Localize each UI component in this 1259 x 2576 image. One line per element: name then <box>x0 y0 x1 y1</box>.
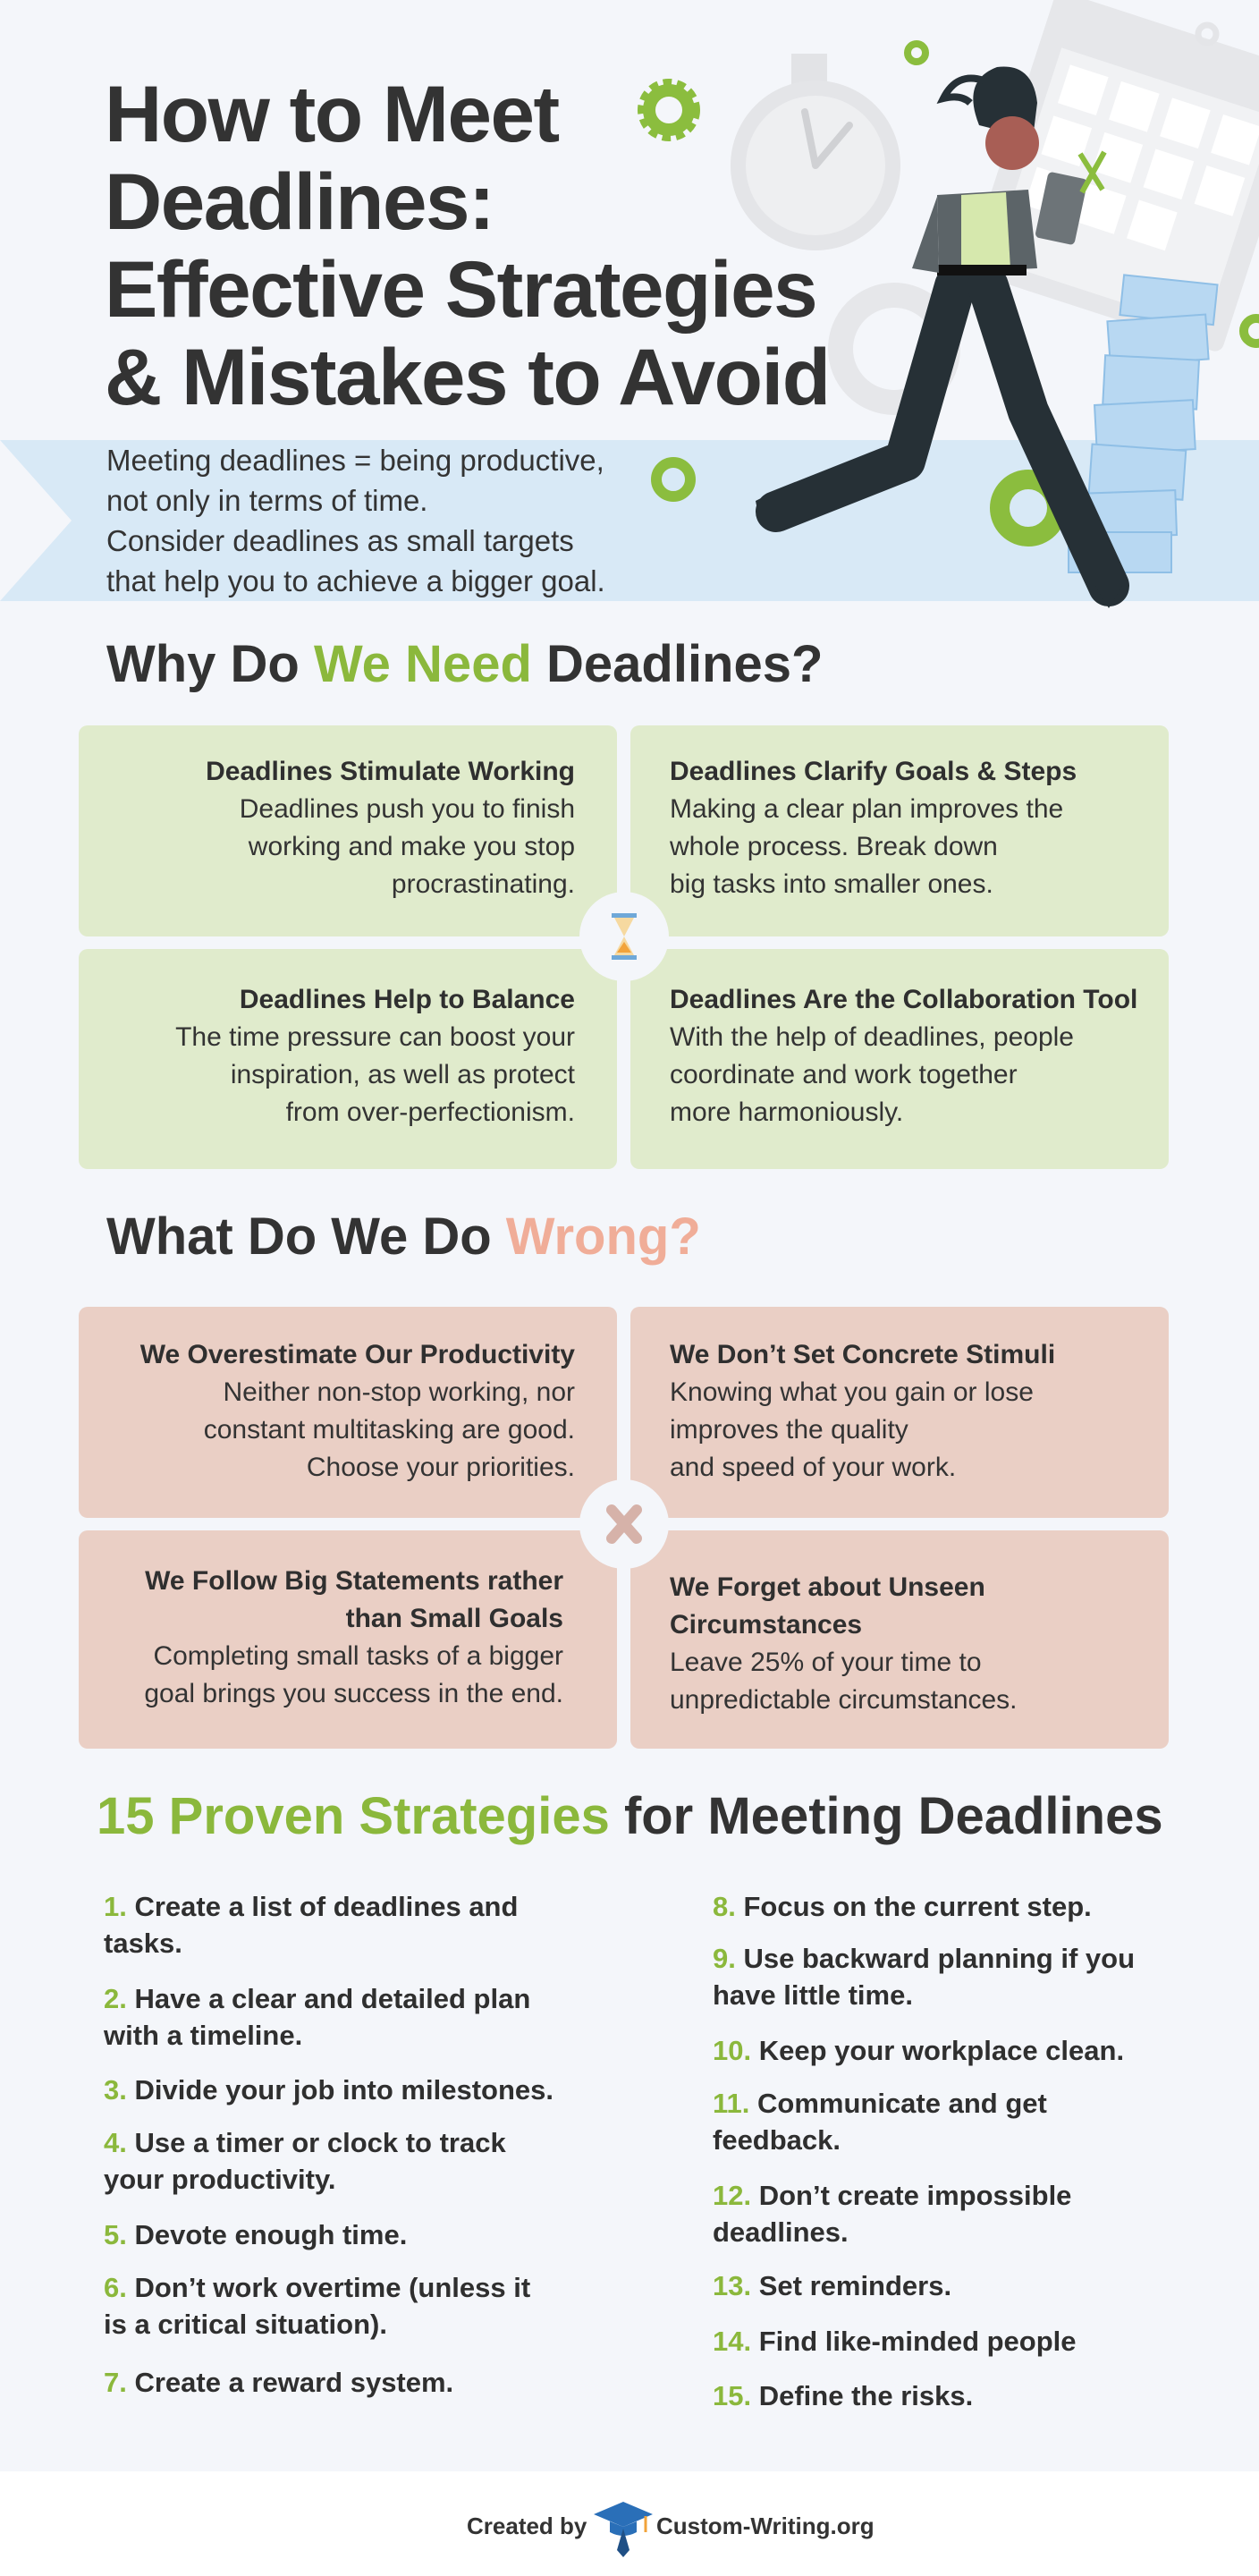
list: strategies right: have little time. <box>713 1979 913 2011</box>
list: strategies right: 12. Don’t create impossible <box>713 2180 1071 2211</box>
card: collaboration: coordinate and work together <box>670 1060 1018 1089</box>
list: strategies left: with a timeline. <box>104 2020 302 2051</box>
title: Deadlines: <box>105 157 494 246</box>
list: strategies right: 15. Define the risks. <box>713 2380 973 2411</box>
card: clarify: whole process. Break down <box>670 832 998 861</box>
list: strategies left: is a critical situation). <box>104 2309 387 2340</box>
heading: strategies: 15 Proven Strategies for Meeting Deadlines <box>97 1787 1163 1845</box>
card: overestimate: constant multitasking are good. <box>204 1415 575 1445</box>
list: strategies left: tasks. <box>104 1928 182 1959</box>
clock <box>731 54 900 250</box>
list: strategies left <box>104 1891 553 2398</box>
card: clarify: Deadlines Clarify Goals & Steps <box>670 757 1077 786</box>
banner text: Consider deadlines as small targets <box>106 524 574 557</box>
card: balance: The time pressure can boost your <box>175 1022 575 1052</box>
card: unseen: Circumstances <box>670 1610 862 1640</box>
woman <box>756 66 1122 608</box>
card: overestimate <box>79 1307 617 1518</box>
card: balance: inspiration, as well as protect <box>231 1060 575 1089</box>
title: & Mistakes to Avoid <box>105 332 830 421</box>
footer <box>0 2471 1259 2576</box>
card: stimuli: We Don’t Set Concrete Stimuli <box>670 1340 1055 1369</box>
banner text: not only in terms of time. <box>106 484 427 517</box>
card: unseen: We Forget about Unseen <box>670 1572 985 1602</box>
footer text: created by: Created by <box>467 2512 587 2539</box>
list: strategies left: 6. Don’t work overtime (unless it <box>104 2272 530 2303</box>
list: strategies right: 9. Use backward planning if you <box>713 1943 1135 1974</box>
card: clarify: big tasks into smaller ones. <box>670 869 993 899</box>
list: strategies left: your productivity. <box>104 2164 336 2195</box>
calendar <box>966 0 1259 353</box>
banner text: Meeting deadlines = being productive, <box>106 444 604 477</box>
list: strategies right <box>713 1891 1135 2411</box>
list: strategies right: 14. Find like-minded people <box>713 2326 1077 2357</box>
list: strategies right: feedback. <box>713 2124 841 2156</box>
banner <box>0 440 1259 601</box>
card: big statements <box>79 1530 617 1749</box>
heading: wrong: What Do We Do Wrong? <box>106 1208 701 1266</box>
card: unseen <box>630 1530 1169 1749</box>
card: collaboration <box>630 949 1169 1169</box>
card: stimuli: improves the quality <box>670 1415 908 1445</box>
card: stimulate: Deadlines Stimulate Working <box>206 757 575 786</box>
heading: why: Why Do We Need Deadlines? <box>106 635 823 693</box>
card: unseen: Leave 25% of your time to <box>670 1648 982 1677</box>
card: stimuli: Knowing what you gain or lose <box>670 1377 1034 1407</box>
card: stimulate: procrastinating. <box>392 869 575 899</box>
list: strategies left: 7. Create a reward system. <box>104 2367 453 2398</box>
card: balance <box>79 949 617 1169</box>
icon: x <box>579 1479 669 1569</box>
list: strategies right: 8. Focus on the current step. <box>713 1891 1092 1922</box>
card: big statements: We Follow Big Statements rather <box>145 1566 563 1596</box>
card: collaboration: With the help of deadlines, people <box>670 1022 1074 1052</box>
card: collaboration: more harmoniously. <box>670 1097 903 1127</box>
card: big statements: goal brings you success in the end. <box>144 1679 563 1708</box>
hero illustration <box>638 0 1259 608</box>
paper stack <box>1069 275 1218 572</box>
list: strategies right: deadlines. <box>713 2216 849 2248</box>
list: strategies left: 3. Divide your job into milestones. <box>104 2074 553 2106</box>
card: collaboration: Deadlines Are the Collaboration Tool <box>670 985 1137 1014</box>
banner text <box>106 444 605 597</box>
card: balance: from over-perfectionism. <box>286 1097 575 1127</box>
title: Effective Strategies <box>105 244 816 334</box>
list: strategies left: 1. Create a list of deadlines and <box>104 1891 518 1922</box>
card: stimuli <box>630 1307 1169 1518</box>
list: strategies right: 13. Set reminders. <box>713 2270 951 2301</box>
card: overestimate: Neither non-stop working, nor <box>223 1377 575 1407</box>
card: overestimate: We Overestimate Our Productivity <box>140 1340 575 1369</box>
list: strategies left: 5. Devote enough time. <box>104 2219 407 2250</box>
card: overestimate: Choose your priorities. <box>307 1453 575 1482</box>
footer text: brand: Custom-Writing.org <box>656 2512 875 2539</box>
card: big statements: than Small Goals <box>346 1604 563 1633</box>
title: How to Meet <box>105 69 559 158</box>
panel: wrong cards <box>79 1307 1169 1749</box>
list: strategies left: 2. Have a clear and detailed plan <box>104 1983 530 2014</box>
card: stimulate <box>79 725 617 936</box>
icon: logo <box>594 2502 653 2557</box>
card: clarify <box>630 725 1169 936</box>
card: stimulate: Deadlines push you to finish <box>240 794 575 824</box>
title <box>105 69 830 421</box>
list: strategies right: 11. Communicate and get <box>713 2088 1047 2119</box>
card: stimulate: working and make you stop <box>249 832 575 861</box>
list: strategies left: 4. Use a timer or clock to track <box>104 2127 506 2158</box>
icon: hourglass <box>579 892 669 981</box>
card: balance: Deadlines Help to Balance <box>240 985 575 1014</box>
gears green <box>646 44 1259 537</box>
gray gear <box>841 295 948 402</box>
card: stimuli: and speed of your work. <box>670 1453 956 1482</box>
list: strategies right: 10. Keep your workplace clean. <box>713 2035 1124 2066</box>
panel: why cards <box>79 725 1169 1169</box>
card: clarify: Making a clear plan improves the <box>670 794 1063 824</box>
card: unseen: unpredictable circumstances. <box>670 1685 1018 1715</box>
card: big statements: Completing small tasks of a bigger <box>153 1641 563 1671</box>
banner text: that help you to achieve a bigger goal. <box>106 564 605 597</box>
